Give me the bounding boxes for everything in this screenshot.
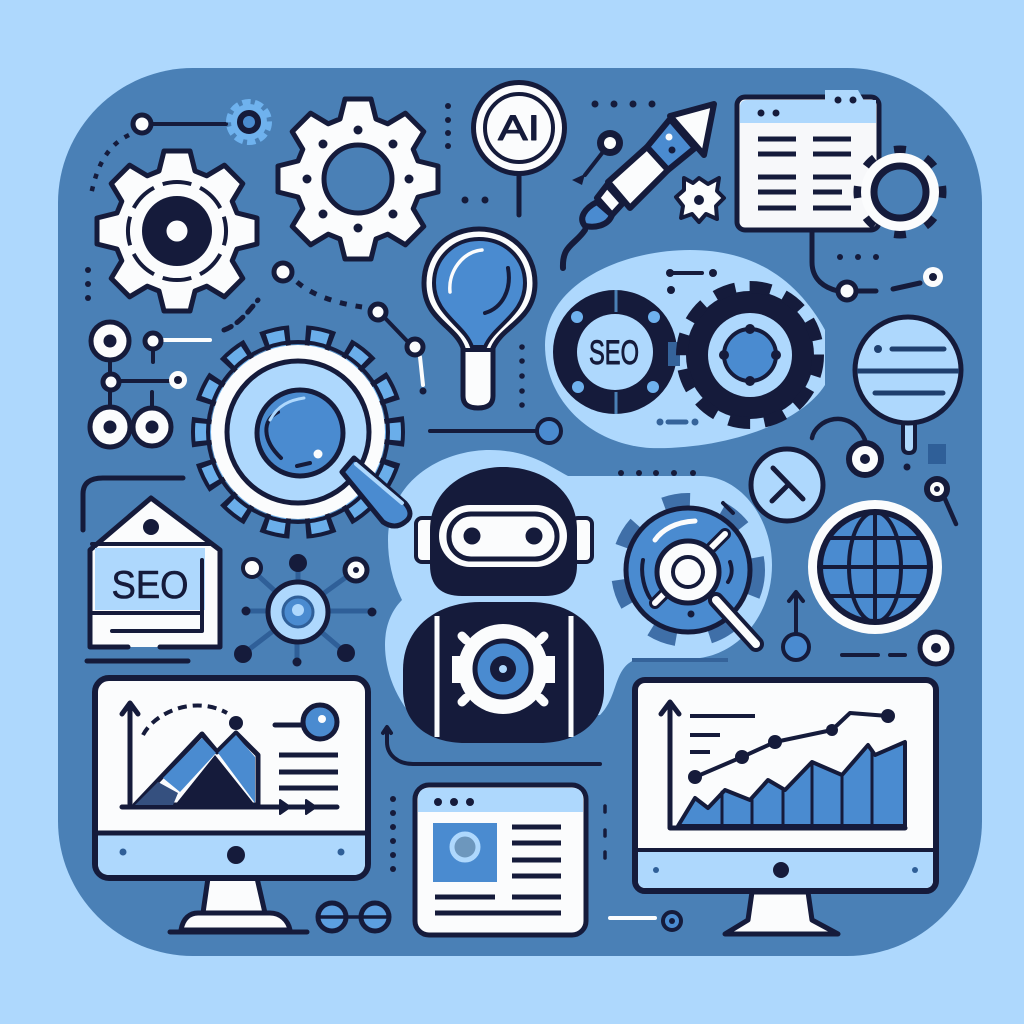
panel: SEO gears bubble xyxy=(545,250,825,448)
icon: network hub xyxy=(234,554,376,666)
small link box xyxy=(668,342,680,366)
icon: SEO tag: SEO xyxy=(112,564,188,607)
robot ears xyxy=(416,518,592,562)
bar under robot blob xyxy=(632,658,728,662)
icon: gear magnifier xyxy=(620,502,756,644)
icon: SEO wheel: SEO xyxy=(589,334,639,372)
robot body xyxy=(403,602,604,743)
robot head xyxy=(430,467,577,596)
icon: small connector gear xyxy=(85,102,269,301)
panel: rounded blue background xyxy=(58,68,982,956)
connector line with node xyxy=(812,232,943,300)
icon: SEO wheel xyxy=(553,290,677,414)
icon: globe xyxy=(808,500,942,634)
icon: light bulb magnifier xyxy=(424,229,535,408)
icon: glasses link xyxy=(318,903,389,931)
icon: browser centre bottom xyxy=(415,785,586,935)
icon: dark gear xyxy=(682,287,818,423)
icon: clock circle xyxy=(751,449,823,521)
icon: robot xyxy=(403,467,604,743)
icon: AI pin xyxy=(445,80,567,215)
icon: gear on document xyxy=(853,145,947,239)
right chart xyxy=(661,702,905,828)
icon: dots above magnifier xyxy=(618,470,696,476)
icon: AI pin: AI xyxy=(498,109,540,148)
icon: speech circle xyxy=(855,317,961,453)
icon: magnifier on gear xyxy=(177,311,419,553)
icon: rocket pen xyxy=(563,104,714,268)
icon: connector bottom xyxy=(383,727,681,930)
icon: browser document xyxy=(737,90,879,230)
panel: robot background blob xyxy=(385,450,772,725)
icon: up arrow and small nodes xyxy=(783,592,952,664)
left chart xyxy=(122,703,338,814)
icon: dots and pin by rocket xyxy=(572,100,656,185)
icon: node arc and small items xyxy=(812,419,956,524)
icon: circuit nodes left xyxy=(90,322,210,447)
icon: right monitor xyxy=(635,680,936,934)
icon: left monitor xyxy=(95,678,368,932)
icon: SEO tag xyxy=(83,478,220,661)
connector path with nodes xyxy=(224,263,561,443)
icon: gear top centre xyxy=(278,99,438,259)
robot chest gear xyxy=(452,624,555,714)
icon: large gear top left xyxy=(97,151,257,311)
icon: small star gear xyxy=(676,178,724,222)
robot visor xyxy=(439,505,567,567)
